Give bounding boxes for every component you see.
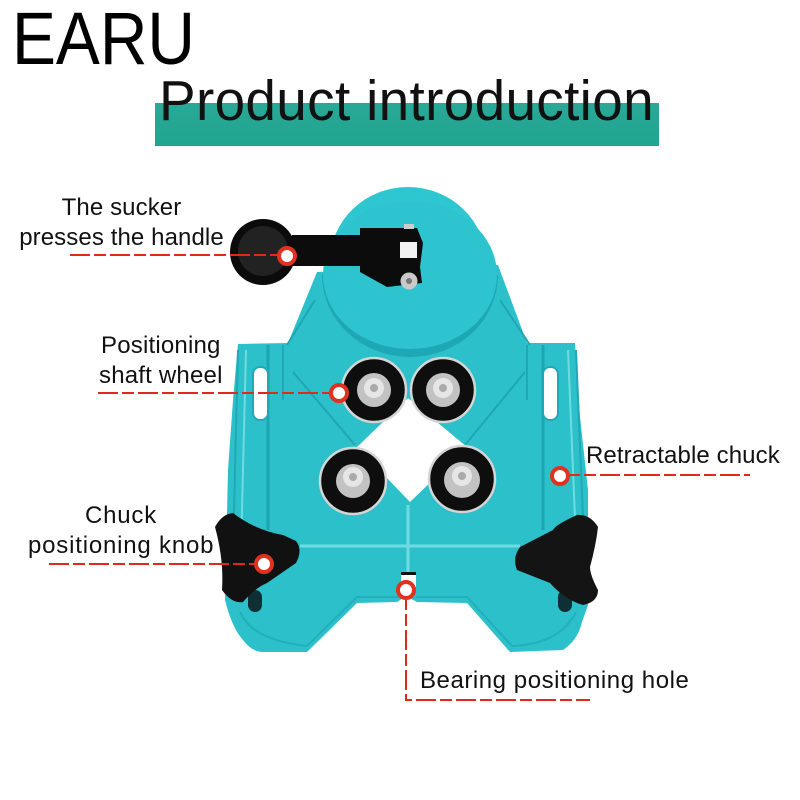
label: sucker handle	[19, 194, 224, 251]
label: chuck positioning knob	[28, 502, 214, 559]
embossed ribs	[300, 505, 520, 572]
callout dots	[256, 248, 568, 598]
left knob	[215, 513, 300, 602]
leader lines	[49, 255, 750, 700]
raised triangular panels	[287, 300, 530, 445]
adjusting slots	[253, 367, 268, 420]
label: retractable chuck: Retractable chuck	[586, 442, 780, 469]
label: sucker handle: presses the handle	[19, 224, 224, 251]
bearing wheels	[320, 358, 495, 514]
label: chuck positioning knob: positioning knob	[28, 532, 214, 559]
label: chuck positioning knob: Chuck	[85, 502, 157, 529]
right knob	[515, 515, 598, 605]
label: bearing positioning hole: Bearing positioning hole	[420, 667, 689, 694]
label: positioning shaft wheel: shaft wheel	[99, 362, 223, 389]
label: positioning shaft wheel: Positioning	[101, 332, 221, 359]
base plate	[225, 265, 588, 652]
label: positioning shaft wheel	[99, 332, 223, 389]
wing channels	[268, 345, 543, 530]
heading banner bar	[155, 103, 659, 146]
suction cup	[322, 187, 498, 357]
label: sucker handle: The sucker	[62, 194, 181, 221]
title: Product introduction	[159, 69, 654, 133]
handle	[230, 219, 423, 290]
centre cut-out	[357, 398, 467, 587]
